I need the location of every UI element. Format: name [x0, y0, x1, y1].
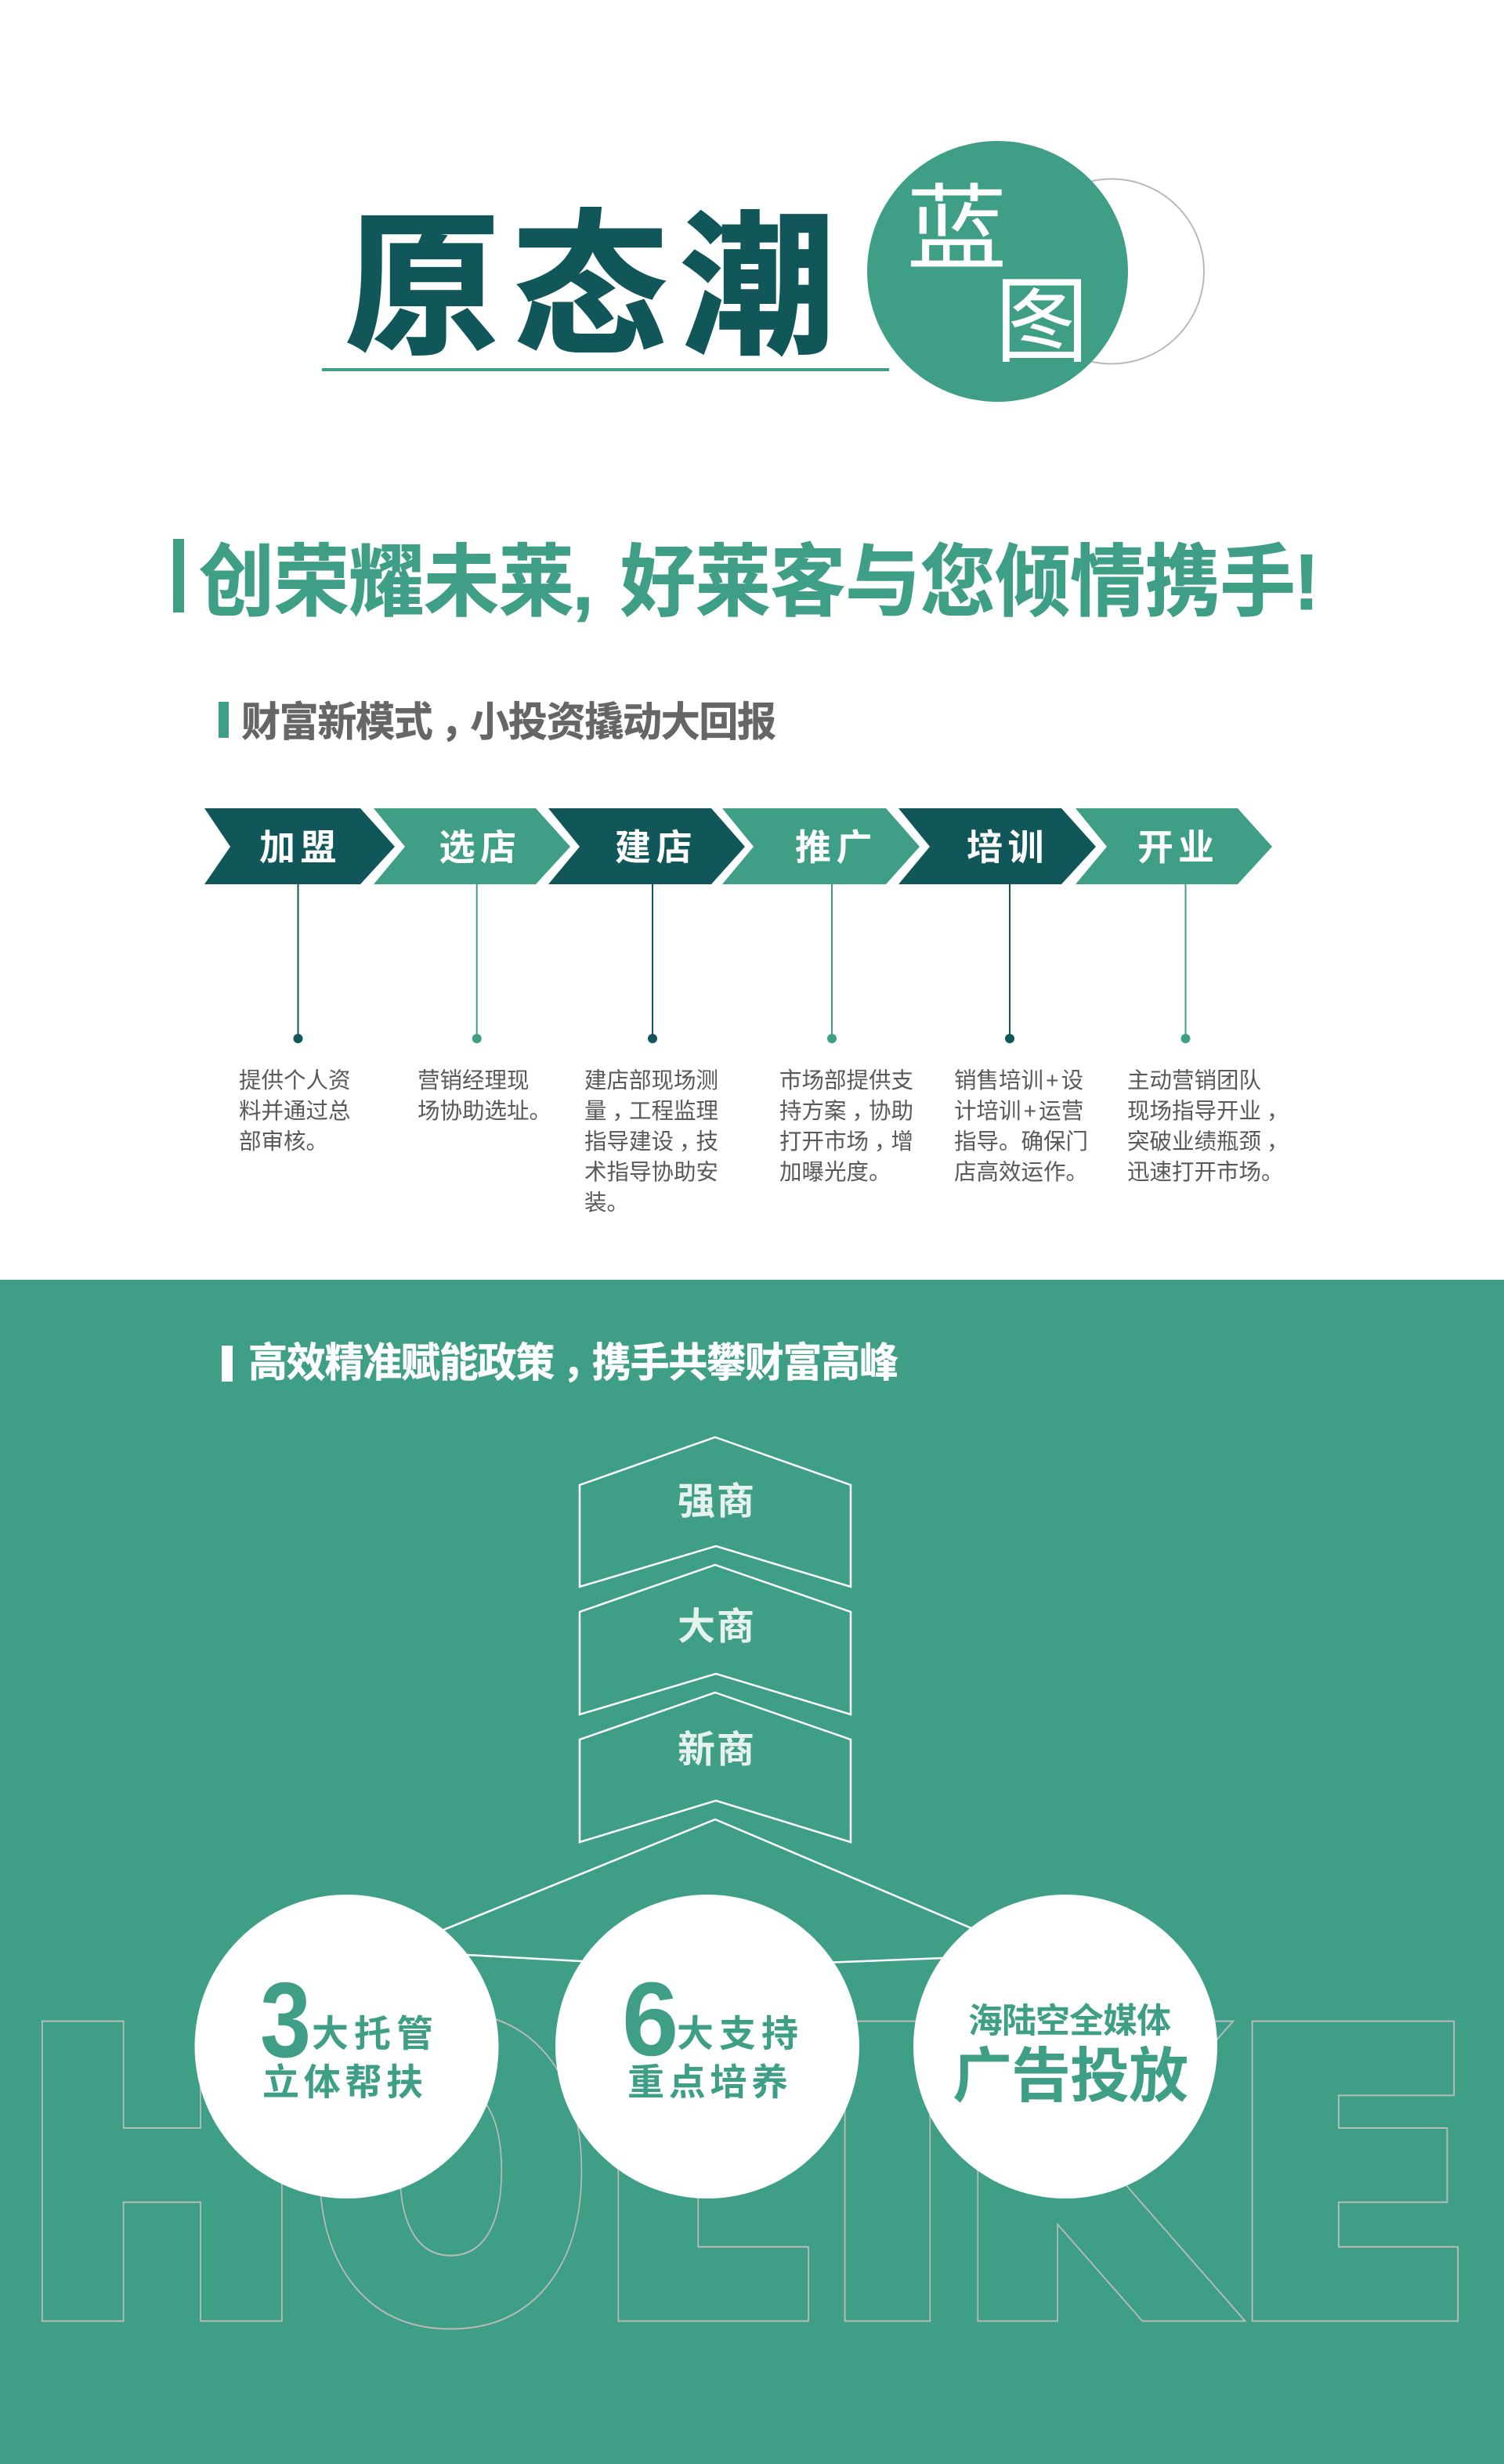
base lower line right — [822, 1957, 964, 1963]
circle: 6大支持: 6 — [622, 1960, 678, 2077]
description: 开业: 主动营销团队 — [1127, 1068, 1261, 1093]
watermark: HOLIKE outlined letters: O — [312, 1949, 590, 2406]
filled circle — [867, 141, 1128, 402]
description: 培训: 指导。确保门 — [954, 1129, 1088, 1154]
connector 4 — [827, 884, 837, 1043]
description: 培训: 店高效运作。 — [954, 1160, 1088, 1185]
tier: 强商: 强商 — [678, 1481, 754, 1523]
panel: green policy section — [0, 1280, 1504, 2464]
description: 开业: 迅速打开市场。 — [1127, 1160, 1284, 1185]
description: 建店: 建店部现场测 — [584, 1068, 718, 1093]
tier: 大商 — [580, 1565, 851, 1714]
watermark: HOLIKE outlined letters: I — [821, 1955, 954, 2402]
chevron stack — [376, 1437, 1042, 1963]
process chevrons — [204, 808, 1272, 884]
title text: 原态潮 — [345, 201, 835, 374]
connector 6 — [1181, 884, 1191, 1043]
watermark: HOLIKE outlined letters: I — [821, 1955, 954, 2402]
step: 推广 — [722, 808, 920, 884]
circle: 6大支持: 大支持 — [677, 2013, 798, 2054]
title underline — [322, 368, 889, 371]
description: 建店: 量，工程监理 — [584, 1099, 718, 1124]
description: 推广: 加曝光度。 — [779, 1160, 891, 1185]
description: 建店: 术指导协助安 — [584, 1160, 718, 1185]
heading bar — [219, 702, 229, 738]
description: 加盟: 料并通过总 — [239, 1099, 351, 1124]
circle: 3大托管: 大托管 — [312, 2013, 433, 2054]
section heading: 高效精准赋能政策 — [222, 1340, 898, 1386]
description: 推广: 持方案，协助 — [779, 1099, 913, 1124]
step: 开业: 开业 — [1137, 827, 1214, 868]
watermark: HOLIKE outlined letters: L — [596, 1955, 809, 2402]
circle: 海陆空全媒体 广告投放: 海陆空全媒体 — [968, 2002, 1171, 2040]
connector 5 — [1005, 884, 1014, 1043]
circle: 6大支持 — [555, 1895, 859, 2198]
step: 加盟 — [204, 808, 395, 884]
tier: 新商 — [580, 1693, 851, 1842]
heading text: 财富新模式，小投资撬动大回报 — [241, 699, 776, 745]
watermark: HOLIKE outlined letters: O — [312, 1949, 590, 2406]
circle text: 蓝: 蓝 — [906, 178, 1007, 282]
connector 1 — [293, 884, 302, 1043]
circle: 海陆空全媒体 广告投放: 广告投放 — [953, 2043, 1188, 2110]
description: 培训: 计培训+运营 — [954, 1099, 1083, 1124]
description: 建店: 指导建设，技 — [584, 1129, 718, 1154]
step: 建店 — [548, 808, 745, 884]
description: 选店: 营销经理现 — [418, 1068, 530, 1093]
description: 选店: 场协助选址。 — [418, 1099, 551, 1124]
description: 加盟: 提供个人资 — [239, 1068, 351, 1093]
slogan bar — [173, 539, 184, 612]
step: 培训 — [898, 808, 1096, 884]
step: 建店: 建店 — [615, 827, 692, 868]
step: 培训: 培训 — [967, 827, 1043, 868]
step: 加盟: 加盟 — [259, 827, 337, 868]
connectors with dots — [293, 884, 1191, 1043]
slogan heading — [173, 538, 1319, 627]
title: 原态潮 蓝图 — [322, 141, 1204, 402]
watermark: HOLIKE outlined letters: L — [596, 1955, 809, 2402]
description: 推广: 市场部提供支 — [779, 1068, 913, 1093]
base lower line left — [439, 1953, 595, 1962]
circle: 3大托管: 3 — [260, 1960, 311, 2079]
watermark: HOLIKE outlined letters: E — [1228, 1956, 1475, 2402]
description: 加盟: 部审核。 — [239, 1129, 328, 1154]
tier: 强商 — [580, 1437, 851, 1587]
heading bar — [222, 1346, 233, 1382]
tier: 新商: 新商 — [678, 1729, 754, 1771]
description: 开业: 突破业绩瓶颈， — [1127, 1129, 1289, 1154]
slogan text: 创荣耀未莱,好莱客与您倾情携手! — [199, 538, 1319, 627]
circle: 3大托管 — [194, 1895, 498, 2198]
watermark: HOLIKE outlined letters: H — [20, 1956, 305, 2402]
watermark: HOLIKE outlined letters: H — [20, 1956, 305, 2402]
step: 选店: 选店 — [439, 827, 516, 868]
description: 建店: 装。 — [584, 1190, 629, 1216]
connector 2 — [472, 884, 482, 1043]
connector 3 — [648, 884, 657, 1043]
circle: 6大支持: 重点培养 — [627, 2061, 788, 2103]
description: 推广: 打开市场，增 — [779, 1129, 913, 1154]
section heading: 财富新模式 — [219, 699, 776, 745]
step descriptions — [239, 1068, 1295, 1216]
watermark: HOLIKE outlined letters: E — [1228, 1956, 1475, 2402]
outline circle — [1019, 179, 1204, 363]
circle: 3大托管: 立体帮扶 — [262, 2061, 423, 2103]
watermark: HOLIKE outlined letters: K — [956, 1955, 1227, 2402]
base chevron lines — [376, 1819, 1042, 1958]
circle: 海陆空全媒体 广告投放 — [913, 1895, 1217, 2198]
watermark: HOLIKE outlined letters: K — [956, 1955, 1227, 2402]
heading text: 高效精准赋能政策，携手共攀财富高峰 — [248, 1340, 898, 1386]
circle text: 图: 图 — [995, 269, 1089, 374]
step: 开业 — [1076, 808, 1272, 884]
step: 推广: 推广 — [795, 827, 873, 868]
step: 选店 — [374, 808, 570, 884]
watermark: HOLIKE outlined letters — [20, 1949, 1475, 2406]
description: 开业: 现场指导开业， — [1127, 1099, 1289, 1124]
description: 培训: 销售培训+设 — [954, 1068, 1083, 1093]
tier: 大商: 大商 — [678, 1606, 754, 1648]
